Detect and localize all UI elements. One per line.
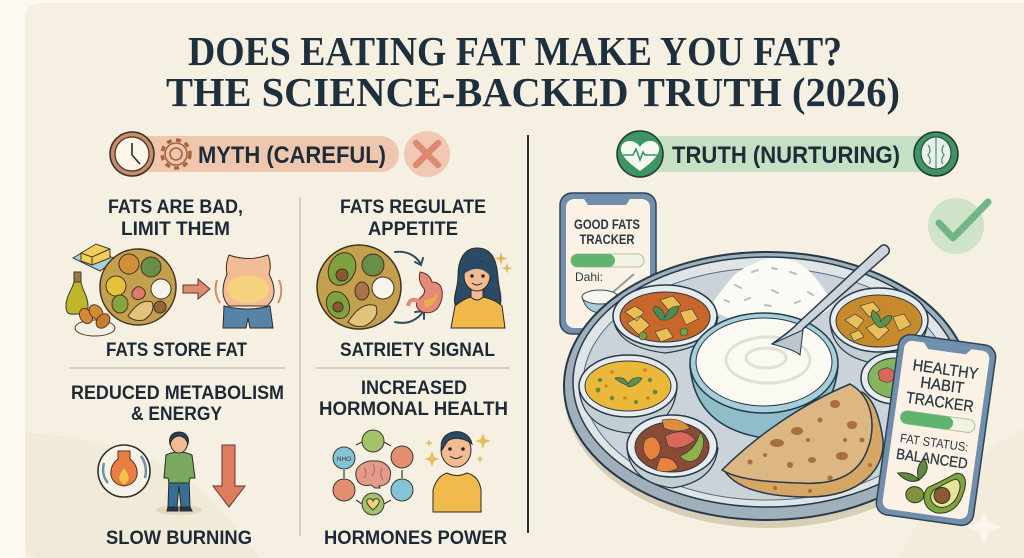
icon: hormone network [333,430,413,515]
caption: HORMONES POWER [324,527,507,549]
icon: clock [110,132,154,176]
myth header [110,131,450,177]
dal bowl [579,355,677,433]
phone text: HEALTHY [912,357,980,383]
icon: oil bottle [66,272,88,314]
icon: avocado and olives [893,455,968,516]
center divider [527,135,529,533]
myth label: MYTH (CAREFUL) [198,142,386,169]
curry bowl right [830,288,928,364]
heading [108,196,243,240]
heading: REDUCED METABOLISM [71,382,284,404]
plate [564,252,972,528]
icon: standing man [156,432,202,515]
icon: healthy fat plate [317,245,401,329]
icon: check mark [928,198,988,254]
icon: fried snacks [75,302,115,336]
heading: FATS ARE BAD, [108,196,243,218]
icon: dahi bowl [582,274,634,313]
title: DOES EATING FAT MAKE YOU FAT? [188,28,842,74]
icon: plate of foods [100,249,176,325]
roti [722,384,883,497]
yogurt bowl [690,313,838,438]
phone text [905,357,980,416]
icon: brain [356,461,391,488]
heading: & ENERGY [131,403,222,425]
icon: cross [404,131,450,177]
vegetable bowl [627,415,718,488]
caption: SATRIETY SIGNAL [340,339,495,361]
panel: fats regulate appetite [317,196,512,361]
truth label: TRUTH (NURTURING) [672,142,900,169]
phone text: HABIT [919,374,965,397]
icon: brain [914,132,958,176]
fat status [895,431,971,473]
heading [319,377,508,420]
arrow [183,279,210,299]
icon: smiling boy [424,432,491,512]
spoon [772,245,889,355]
panel: fats are bad [66,196,281,361]
icon: smiling woman [451,248,512,328]
curry bowl left [613,285,718,353]
plate illustration [564,245,972,528]
heading: FATS REGULATE [340,196,486,218]
caption: SLOW BURNING [106,527,252,549]
panel dividers [299,197,301,536]
heading: LIMIT THEM [121,218,230,240]
phone: good fats tracker: TRACKER [580,231,634,247]
caption: FATS STORE FAT [106,339,247,361]
fat status: FAT STATUS: [899,431,969,455]
arrows to stomach [395,252,424,323]
heading: HORMONAL HEALTH [319,398,508,420]
icon: metabolism flame [98,445,150,497]
dahi label: Dahi: [575,270,603,284]
phone: good fats tracker [560,193,656,334]
icon: belly [216,255,281,328]
icon: gear [162,140,190,168]
panel: reduced metabolism [71,382,284,549]
phone text: TRACKER [905,390,975,416]
title: THE SCIENCE-BACKED TRUTH (2026) [166,69,900,115]
rice [710,258,833,324]
phone: healthy habit tracker [875,333,997,527]
fat status: BALANCED [895,446,969,473]
panel: hormonal health [319,377,508,549]
heading [71,382,284,425]
sparkle watermark [967,510,1001,544]
arrow down [213,445,245,507]
progress bar [571,254,644,267]
truth header [617,131,958,177]
heading [340,196,486,240]
heading: APPETITE [368,218,458,240]
icon: heart [617,131,663,177]
hormone label: NHO [337,456,351,463]
heading: INCREASED [361,377,467,399]
progress bar [900,410,976,433]
icon: butter [73,244,117,271]
icon: stomach [408,272,442,313]
phone text: GOOD FATS [574,216,640,232]
salad bowl [861,352,929,404]
title [166,28,900,115]
